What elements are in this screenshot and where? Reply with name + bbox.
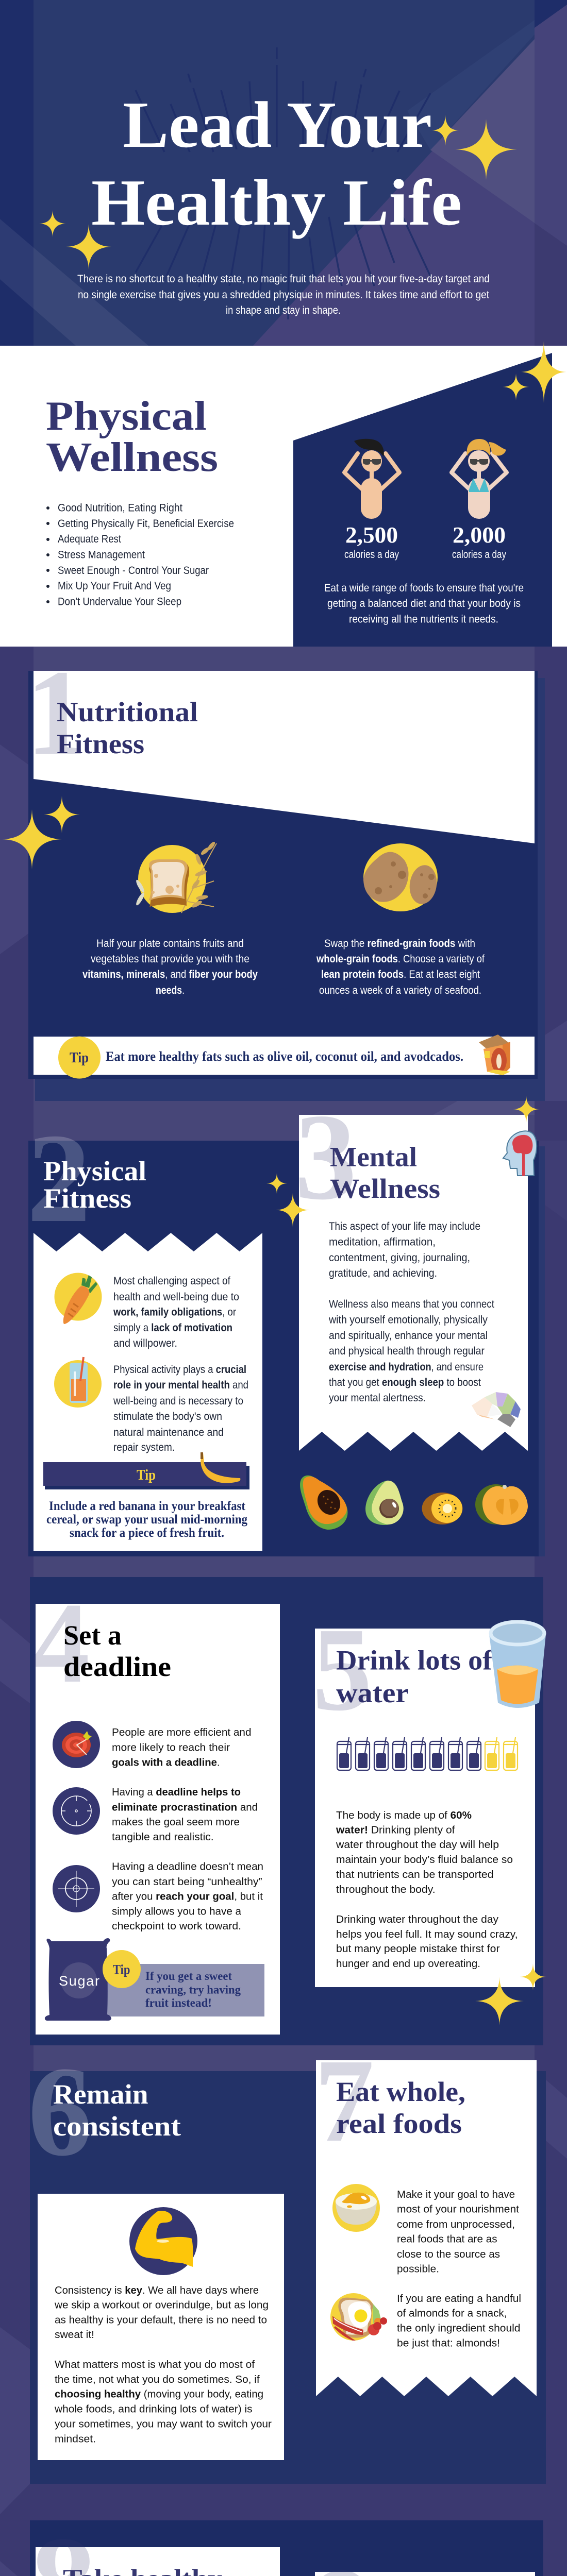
heading xyxy=(53,2079,181,2142)
intro text: no single exercise that gives you a shredded physique in minutes. It takes time and effort to get xyxy=(78,289,489,301)
text: having a deadline doesn't mean: checkpoint to work toward. xyxy=(112,1921,241,1932)
bullet list: Don't Undervalue Your Sleep xyxy=(58,596,181,608)
heading: Fitness xyxy=(57,728,144,759)
panel: 3 mental wellness: 3 xyxy=(295,1088,357,1225)
text: tip: cereal, or swap your usual mid-morning xyxy=(46,1513,247,1527)
text: most challenging: health and well-being due to xyxy=(113,1291,239,1303)
heading: water xyxy=(336,1677,409,1708)
text: having a deadline doesn't mean: after you reach your goal, but it xyxy=(112,1891,263,1903)
bullet list: Adequate Rest xyxy=(58,533,121,545)
text: most challenging: and willpower. xyxy=(113,1337,177,1349)
text: body is made up: water! Drinking plenty of xyxy=(336,1825,455,1836)
panel: 6 remain consistent xyxy=(28,2040,284,2460)
text: physical activity: natural maintenance and xyxy=(113,1427,224,1438)
panel: 2 physical fitness: 2 xyxy=(27,1107,91,1249)
intro text: There is no shortcut to a healthy state, no magic fruit that lets you hit your five-a-day target and xyxy=(77,273,490,285)
text: swap refined grain: ounces a week of a variety of seafood. xyxy=(319,985,481,996)
title xyxy=(91,88,462,239)
icon: toast with egg and bacon xyxy=(330,2293,387,2341)
text: handful of almonds: If you are eating a handful xyxy=(397,2293,521,2304)
text: make it your goal: close to the source as xyxy=(397,2249,500,2260)
text: make it your goal: come from unprocessed, xyxy=(397,2219,515,2230)
text: half your plate: Half your plate contains fruits and xyxy=(96,938,244,950)
heading: Set a xyxy=(63,1620,122,1651)
text: make it your goal: possible. xyxy=(397,2264,439,2275)
text: physical activity xyxy=(113,1364,248,1453)
intro text xyxy=(77,273,490,316)
intro text: in shape and stay in shape. xyxy=(226,304,341,316)
heading: real foods xyxy=(336,2108,462,2139)
calorie text: getting a balanced diet and that your body is xyxy=(327,598,521,609)
text: this aspect xyxy=(329,1221,480,1279)
bullet list: Sweet Enough - Control Your Sugar xyxy=(58,565,209,577)
heading: deadline xyxy=(63,1651,171,1682)
white card xyxy=(34,1233,262,1551)
calorie numbers: calories a day xyxy=(344,549,399,561)
number: 1 xyxy=(26,645,87,781)
text: having a deadline doesn't mean: you can start being “unhealthy” xyxy=(112,1876,262,1888)
calorie numbers: 2,000 xyxy=(453,522,506,548)
chart: ten glasses pictogram xyxy=(337,1737,518,1770)
calorie numbers xyxy=(344,522,506,561)
icon: crosshair xyxy=(53,1865,100,1912)
tip box xyxy=(107,1964,264,2016)
white card xyxy=(38,2194,284,2460)
panel: 5 drink lots of water xyxy=(312,1603,546,2025)
text: most challenging: simply a lack of motivation xyxy=(113,1322,232,1334)
heading: Physical xyxy=(43,1156,146,1187)
text: what matters xyxy=(54,2359,272,2445)
icon: target xyxy=(53,1721,100,1768)
text: swap refined grain: whole-grain foods. Choose a variety of xyxy=(316,953,485,965)
text: wellness also: and physical health through regular xyxy=(329,1345,485,1357)
text: drinking water: helps you feel full. It may sound crazy, xyxy=(336,1929,518,1940)
text: physical activity: repair system. xyxy=(113,1442,175,1453)
panel: 1 nutritional fitness xyxy=(2,645,545,1101)
bullet list: Mix Up Your Fruit And Veg xyxy=(58,580,171,592)
calorie text xyxy=(324,582,524,625)
text: body is made up: throughout the body. xyxy=(336,1884,436,1895)
text: swap refined grain xyxy=(316,938,485,996)
calorie numbers: 2,500 xyxy=(345,522,398,548)
bullet list xyxy=(46,502,234,608)
text: tip: Include a red banana in your breakfast xyxy=(49,1499,246,1513)
stars xyxy=(503,341,566,403)
text: handful of almonds: of almonds for a snack, xyxy=(397,2308,507,2319)
calorie numbers: calories a day xyxy=(452,549,506,561)
tip heading bar xyxy=(43,1462,249,1489)
text: people are more efficient: People are more efficient and xyxy=(112,1727,252,1738)
panel: physical wellness xyxy=(0,341,567,647)
text: having a deadline helps: eliminate procrastination and xyxy=(112,1802,258,1813)
text: body is made up: that nutrients can be transported xyxy=(336,1869,494,1880)
stars between panel 2 and 3 xyxy=(266,1096,540,1227)
text: body is made up: water throughout the day will help xyxy=(336,1839,499,1851)
text: drinking water: Drinking water throughout the day xyxy=(336,1914,498,1925)
panel: 8 and 9 background xyxy=(30,2520,543,2576)
text: swap refined grain: lean protein foods. Eat at least eight xyxy=(321,969,480,980)
panel: 2 physical fitness xyxy=(27,1107,262,1551)
text: half your plate: vegetables that provide you with the xyxy=(91,953,249,965)
heading xyxy=(46,394,218,480)
icon: egg xyxy=(332,2184,380,2232)
icon: banana xyxy=(201,1452,240,1483)
text: handful of almonds xyxy=(397,2293,521,2349)
text: what matters: the time, not what you do sometimes. So, if xyxy=(55,2374,260,2385)
text: most challenging: work, family obligations, or xyxy=(113,1307,236,1318)
calorie text: Eat a wide range of foods to ensure that you're xyxy=(324,582,524,594)
icon: sugar bag: Sugar xyxy=(59,1973,99,1989)
heading xyxy=(43,1156,146,1214)
text: physical activity: role in your mental health and xyxy=(113,1379,248,1391)
heading xyxy=(57,697,198,759)
calorie text: receiving all the nutrients it needs. xyxy=(349,614,498,625)
heading: Drink lots of xyxy=(336,1645,493,1676)
text: having a deadline helps: tangible and realistic. xyxy=(112,1832,214,1843)
icon: papaya xyxy=(300,1476,347,1530)
tip heading bar: Tip xyxy=(137,1467,156,1483)
title: Healthy Life xyxy=(91,166,462,239)
text: this aspect: gratitude, and achieving. xyxy=(329,1267,437,1279)
text: consistency: sweat it! xyxy=(55,2329,94,2341)
icon: woman xyxy=(452,439,507,519)
text: tip: snack for a piece of fresh fruit. xyxy=(70,1526,224,1540)
text: people are more efficient xyxy=(112,1727,252,1768)
icon: clock dial xyxy=(53,1787,100,1835)
text: half your plate: vitamins, minerals, and fiber your body xyxy=(82,969,258,980)
heading: Mental xyxy=(330,1142,417,1173)
panel: 4 and 5 background xyxy=(30,1577,543,2045)
text: this aspect: contentment, giving, journaling, xyxy=(329,1252,470,1264)
header stars xyxy=(39,115,517,269)
text: having a deadline doesn't mean xyxy=(112,1861,263,1932)
text: make it your goal: real foods that are as xyxy=(397,2234,497,2245)
text: body is made up: The body is made up of 60% xyxy=(336,1810,472,1821)
panel: 4 set a deadline xyxy=(32,1579,280,2035)
text: make it your goal: Make it your goal to have xyxy=(397,2189,515,2200)
icon: carrot xyxy=(55,1273,102,1324)
text: physical activity: well-being and is necessary to xyxy=(113,1395,243,1407)
text: consistency: Consistency is key. We all have days where xyxy=(55,2285,259,2296)
panel: 4 set a deadline: 4 xyxy=(32,1579,90,1707)
heading xyxy=(336,1645,493,1708)
heading xyxy=(336,2076,465,2139)
text: drinking water xyxy=(336,1914,518,1970)
text: drinking water: but many people mistake thirst for xyxy=(336,1943,500,1955)
text: people are more efficient: goals with a deadline. xyxy=(112,1757,220,1768)
tip bar xyxy=(34,1035,535,1079)
decorative title rays xyxy=(136,47,430,319)
heading xyxy=(63,1620,171,1682)
text: most challenging: Most challenging aspect of xyxy=(113,1275,230,1287)
text: people are more efficient: more likely to reach their xyxy=(112,1742,230,1754)
icon: potatoes xyxy=(363,843,439,911)
icon: juice glass xyxy=(489,1622,546,1708)
heading: Fitness xyxy=(43,1183,131,1214)
icon: bread xyxy=(135,841,216,913)
bullet list: Getting Physically Fit, Beneficial Exercise xyxy=(58,518,234,530)
panel: 9 take your workout with you xyxy=(312,2542,550,2576)
panel: 6 remain consistent: 6 xyxy=(28,2040,92,2183)
text: wellness also: that you get enough sleep to boost xyxy=(329,1377,481,1388)
text: what matters: your sometimes, you may want to switch your xyxy=(55,2418,272,2430)
header background xyxy=(0,0,567,346)
text: this aspect: This aspect of your life may include xyxy=(329,1221,480,1232)
text: what matters: What matters most is what you do most of xyxy=(55,2359,255,2370)
bullet list: Good Nutrition, Eating Right xyxy=(58,502,182,514)
panel: 8 take healthy nourishing foods xyxy=(3,2510,280,2576)
heading xyxy=(330,1142,440,1204)
icon: kiwi xyxy=(422,1493,463,1524)
tip bar: Eat more healthy fats such as olive oil, coconut oil, and avodcados. xyxy=(106,1049,463,1064)
icon: juice xyxy=(54,1357,102,1408)
tip box: If you get a sweet xyxy=(145,1970,232,1982)
text: having a deadline helps: makes the goal seem more xyxy=(112,1817,240,1828)
panel: 6 and 7 background xyxy=(30,2071,546,2484)
text: half your plate xyxy=(82,938,258,996)
icon: avocado xyxy=(365,1481,404,1525)
icon: sugar bag xyxy=(45,1938,111,2021)
panel: 7 eat whole real foods xyxy=(314,2035,537,2396)
text: handful of almonds: the only ingredient should xyxy=(397,2323,521,2334)
stars xyxy=(2,796,80,869)
panel: 5 drink lots of water: 5 xyxy=(312,1603,372,1736)
text: having a deadline helps xyxy=(112,1787,258,1843)
heading: Eat whole, xyxy=(336,2076,465,2107)
tip badge xyxy=(103,1950,141,1988)
tip box: craving, try having xyxy=(145,1984,241,1996)
panel: 7 eat whole real foods: 7 xyxy=(314,2035,374,2167)
text: what matters: mindset. xyxy=(55,2434,96,2445)
icon: pumpkin xyxy=(475,1484,528,1525)
text: wellness also: and spiritually, enhance your mental xyxy=(329,1330,488,1342)
text: physical activity: Physical activity plays a crucial xyxy=(113,1364,246,1376)
title: Lead Your xyxy=(123,88,432,161)
bullet list: Stress Management xyxy=(58,549,145,561)
text: tip xyxy=(46,1499,247,1540)
text: half your plate: needs. xyxy=(156,985,185,996)
text: having a deadline helps: Having a deadline helps to xyxy=(112,1787,241,1798)
text: what matters: choosing healthy (moving your body, eating xyxy=(55,2388,263,2400)
text: physical activity: stimulate the body's own xyxy=(113,1411,222,1422)
heading: Physical xyxy=(46,394,207,439)
text: what matters: whole foods, and drinking lots of water) is xyxy=(54,2404,253,2415)
text: wellness also: Wellness also means that you connect xyxy=(329,1298,494,1310)
panel: 2 and 3 background xyxy=(28,1141,545,1556)
text: make it your goal: most of your nourishment xyxy=(397,2204,519,2215)
text: consistency: as healthy is your default, there is no need to xyxy=(55,2314,267,2326)
text: wellness also: your mental alertness. xyxy=(329,1392,426,1404)
text: consistency xyxy=(54,2285,269,2341)
heading: Wellness xyxy=(330,1173,440,1204)
stars xyxy=(475,1963,546,2025)
heading: Nutritional xyxy=(57,697,198,727)
heading: Remain xyxy=(53,2079,148,2110)
icon: head with brain xyxy=(503,1131,537,1176)
icon: man xyxy=(344,439,399,519)
text: body is made up xyxy=(336,1810,513,1895)
text: consistency: we skip a workout or overindulge, but as long xyxy=(54,2300,269,2311)
text: swap refined grain: Swap the refined-grain foods with xyxy=(324,938,475,950)
navy calorie panel xyxy=(293,353,552,647)
icon: polygon brain xyxy=(472,1392,521,1427)
text: wellness also: exercise and hydration, and ensure xyxy=(329,1361,483,1373)
tip badge: Tip xyxy=(113,1962,130,1977)
text: having a deadline doesn't mean: Having a deadline doesn’t mean xyxy=(112,1861,263,1872)
text: most challenging xyxy=(113,1275,239,1349)
text: drinking water: hunger and end up overeating. xyxy=(336,1958,480,1970)
heading: consistent xyxy=(53,2111,181,2142)
heading: Wellness xyxy=(46,435,218,480)
icon: cereal box xyxy=(479,1035,510,1075)
panel: 3 mental wellness xyxy=(295,1088,537,1530)
text: this aspect: meditation, affirmation, xyxy=(329,1236,436,1248)
tip bar: Tip xyxy=(70,1050,89,1066)
text: wellness also: with yourself emotionally, physically xyxy=(328,1314,488,1326)
text: make it your goal xyxy=(397,2189,519,2275)
text: having a deadline doesn't mean: simply allows you to have a xyxy=(112,1906,242,1918)
text: handful of almonds: be just that: almonds! xyxy=(397,2338,500,2349)
tip box: fruit instead! xyxy=(145,1996,212,2009)
icon: flexed arm xyxy=(129,2207,197,2275)
text: wellness also xyxy=(328,1298,494,1404)
text: body is made up: maintain your body’s fluid balance so xyxy=(336,1854,513,1866)
